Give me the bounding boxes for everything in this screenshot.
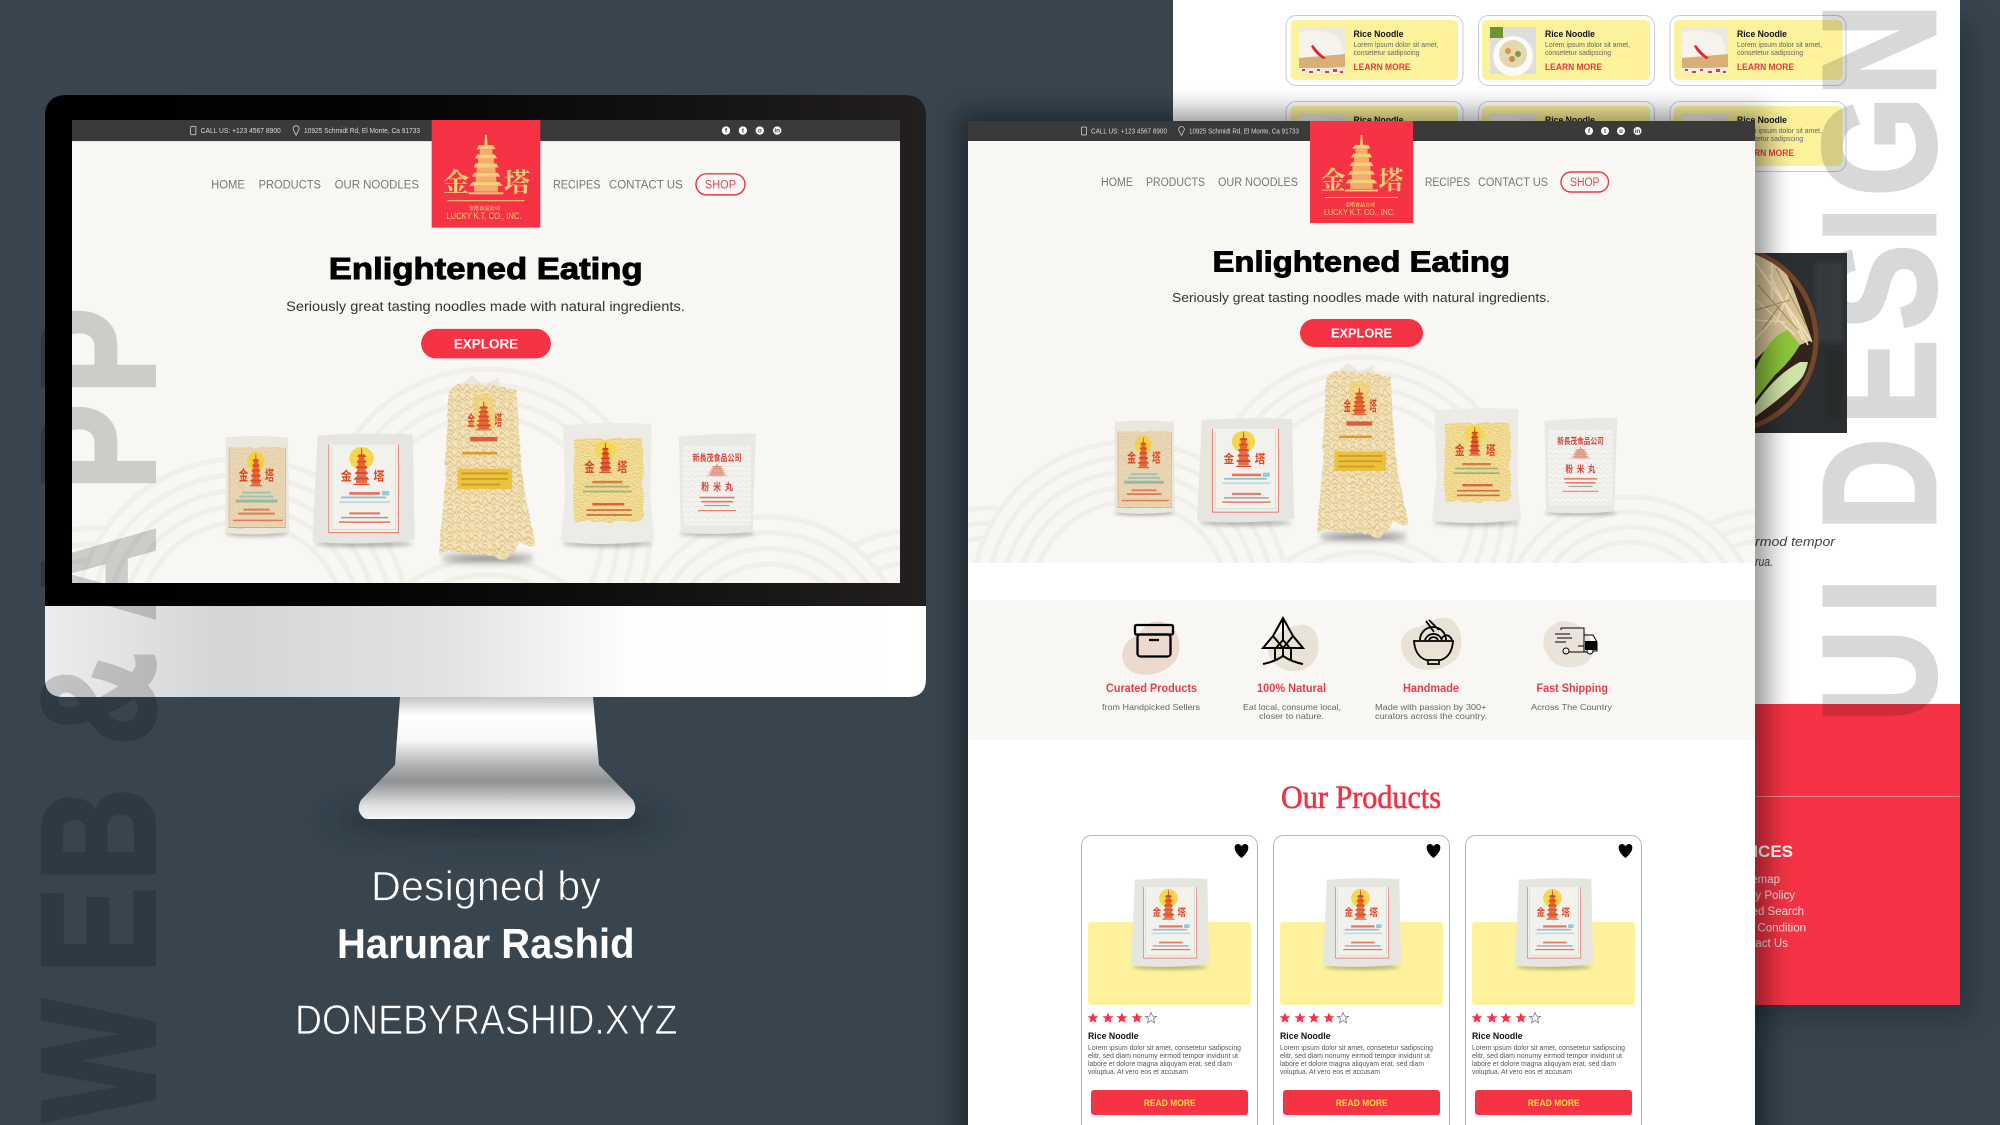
- product card 3: voluptua. At vero eos et accusam: [1472, 1067, 1572, 1076]
- hero subtitle: Seriously great tasting noodles made with natural ingredients.: [1172, 290, 1550, 305]
- logo: 金: [1320, 161, 1346, 197]
- screen top contact bar: CALL US: +123 4567 8900: [201, 126, 281, 135]
- feature: fast shipping: [1531, 621, 1613, 712]
- product bag 5: 新長茂食品公司: [1557, 435, 1604, 448]
- feature: curated products: [1102, 621, 1200, 712]
- navigation: [1101, 172, 1608, 192]
- product bag 3: [1317, 363, 1409, 540]
- navigation: RECIPES: [1425, 177, 1470, 189]
- product bag 5: [1544, 418, 1617, 515]
- screen top contact bar: t: [742, 128, 745, 135]
- website: DONEBYRASHID.XYZ: [295, 996, 678, 1043]
- product card 2: 塔: [1369, 904, 1379, 919]
- product card 3: 金: [1536, 904, 1546, 919]
- product bag 2: 金: [1224, 450, 1235, 467]
- small card 6: [1670, 102, 1846, 172]
- product card 3: Rice Noodle: [1472, 1031, 1522, 1042]
- navigation: HOME: [1101, 177, 1133, 189]
- screen top contact bar: f: [725, 128, 728, 135]
- footer services links: Advanced Search: [1713, 906, 1804, 918]
- screen product bag 3: 金: [467, 409, 475, 431]
- back page shadow: [1200, 20, 1975, 1020]
- feature: handmade: Handmade: [1403, 681, 1459, 695]
- feature: handmade: [1375, 618, 1487, 721]
- product card 1: [1082, 836, 1258, 1125]
- small card 1: Rice Noodle: [1354, 29, 1404, 40]
- product card 2: voluptua. At vero eos et accusam: [1280, 1067, 1380, 1076]
- product bag 4: 金: [1455, 441, 1465, 459]
- small card 6: Lorem ipsum dolor sit amet,: [1737, 126, 1822, 135]
- feature: handmade: Made with passion by 300+: [1375, 702, 1487, 712]
- product card 1: Rice Noodle: [1088, 1031, 1138, 1042]
- designed by: Designed by: [371, 862, 601, 910]
- screen product bag 5: 新長茂食品公司: [693, 451, 742, 464]
- small card 4: [1286, 102, 1463, 172]
- screen product bag 1: 塔: [265, 465, 274, 485]
- feature: 100% natural: Eat local, consume local,: [1243, 702, 1341, 712]
- product card 2: Lorem ipsum dolor sit amet, consetetur sadipscing: [1280, 1043, 1433, 1052]
- panel: front landing page: [968, 121, 1755, 1125]
- screen top contact bar: [71, 120, 901, 141]
- logo: LUCKY K.T. CO., INC.: [1324, 207, 1395, 217]
- small card 4: Rice Noodle: [1354, 115, 1404, 126]
- feature: 100% natural: 100% Natural: [1257, 681, 1326, 695]
- feature: fast shipping: Across The Country: [1531, 702, 1613, 712]
- monitor chin: [45, 606, 926, 697]
- product card 3: labore et dolore magna aliquyam erat, sed diam: [1472, 1059, 1616, 1068]
- screen product bag 2: 塔: [373, 467, 385, 485]
- screen hero subtitle: Seriously great tasting noodles made with natural ingredients.: [286, 299, 685, 314]
- screen logo: 塔: [504, 162, 531, 200]
- screen product bag 2: 金: [341, 467, 352, 485]
- our products heading: Our Products: [1281, 780, 1441, 816]
- small card 2: consetetur sadipscing: [1545, 48, 1611, 57]
- stand shadow: [327, 806, 667, 834]
- top contact bar: f: [1588, 129, 1591, 135]
- top contact bar: in: [1635, 129, 1640, 135]
- screen navigation: PRODUCTS: [259, 178, 321, 192]
- white page sheet: [968, 121, 1755, 1125]
- top contact bar: [968, 121, 1755, 141]
- small card 1: consetetur sadipscing: [1354, 48, 1420, 57]
- product bag 1: 塔: [1152, 449, 1161, 467]
- small recipe cards row 1 and 2: [1286, 16, 1846, 172]
- product card 1: labore et dolore magna aliquyam erat, sed diam: [1088, 1059, 1232, 1068]
- product card 1: 塔: [1177, 904, 1187, 919]
- small card 2: Lorem ipsum dolor sit amet,: [1545, 40, 1630, 49]
- small card 3: [1670, 16, 1846, 86]
- product card 1: 金: [1152, 904, 1162, 919]
- small card 2: LEARN MORE: [1545, 62, 1602, 72]
- product bag 4: [1432, 408, 1521, 526]
- body copy fragment: [1755, 534, 1836, 569]
- product card 3: [1466, 836, 1642, 1125]
- screen navigation: OUR NOODLES: [335, 178, 419, 192]
- monitor bezel: [45, 95, 926, 606]
- small card 1: Lorem ipsum dolor sit amet,: [1354, 40, 1438, 49]
- small card 2: Rice Noodle: [1545, 29, 1595, 40]
- product bag 3: 金: [1344, 396, 1352, 416]
- screen product bag 2: [312, 434, 415, 547]
- product bag 4: 塔: [1486, 441, 1496, 459]
- screen logo: 金: [443, 162, 469, 200]
- screen logo: LUCKY K.T. CO., INC.: [446, 211, 521, 221]
- watermark: UI DESIGN: UI DESIGN: [1790, 4, 1969, 722]
- product card 3: elitr, sed diam nonumy eirmod tempor invidunt ut: [1472, 1051, 1623, 1060]
- top contact bar: o: [1619, 129, 1623, 135]
- screen product bag 3: [439, 375, 536, 562]
- screen explore button: [421, 329, 551, 358]
- screen product bag 5: [679, 433, 756, 536]
- small card 5: Rice Noodle: [1545, 115, 1595, 126]
- product card 3: READ MORE: [1528, 1098, 1580, 1108]
- screen product bag 3: 塔: [494, 409, 502, 431]
- product bag 1: [1114, 420, 1175, 515]
- back page red footer: [1173, 704, 1960, 1005]
- hero title: Enlightened Eating: [1212, 246, 1510, 278]
- noodle bowl photo: [1755, 253, 1847, 433]
- product card 2: elitr, sed diam nonumy eirmod tempor invidunt ut: [1280, 1051, 1431, 1060]
- navigation: CONTACT US: [1478, 177, 1548, 189]
- explore button: [1300, 319, 1423, 347]
- product card 2: labore et dolore magna aliquyam erat, sed diam: [1280, 1059, 1424, 1068]
- screen navigation: SHOP: [705, 178, 736, 192]
- product card 2: Rice Noodle: [1280, 1031, 1330, 1042]
- feature: handmade: curators across the country.: [1375, 711, 1487, 721]
- top contact bar: CALL US: +123 4567 8900: [1091, 128, 1167, 136]
- screen top contact bar: 10925 Schmidt Rd, El Monte, Ca 91733: [304, 126, 420, 135]
- product card 1: elitr, sed diam nonumy eirmod tempor invidunt ut: [1088, 1051, 1239, 1060]
- monitor screen with hero page: [72, 120, 900, 583]
- screen top contact bar: o: [758, 128, 762, 135]
- logo: 金塔食品公司: [1345, 202, 1375, 208]
- screen product bag 1: 金: [239, 465, 248, 485]
- product bag 3: 塔: [1369, 396, 1377, 416]
- product bag 1: 金: [1127, 449, 1137, 467]
- small card 3: Lorem ipsum dolor sit amet,: [1737, 40, 1822, 49]
- small card 1: LEARN MORE: [1354, 62, 1410, 72]
- product card 3: 塔: [1561, 904, 1571, 919]
- feature: fast shipping: Fast Shipping: [1536, 681, 1608, 695]
- screen navigation: [211, 174, 745, 195]
- small card 3: Rice Noodle: [1737, 29, 1787, 40]
- explore button: EXPLORE: [1331, 326, 1392, 340]
- designer name: Harunar Rashid: [337, 920, 634, 967]
- feature: curated products: Curated Products: [1106, 681, 1197, 695]
- screen logo: [432, 120, 540, 228]
- top contact bar: t: [1604, 129, 1606, 135]
- feature: curated products: from Handpicked Sellers: [1102, 702, 1200, 712]
- product card 2: READ MORE: [1336, 1098, 1388, 1108]
- small card 5: [1478, 102, 1654, 172]
- small card 2: [1478, 16, 1654, 86]
- screen product bag 4: 塔: [617, 458, 628, 477]
- logo: 塔: [1378, 161, 1404, 197]
- panel: back UI design page: [1173, 0, 1975, 1020]
- screen navigation: CONTACT US: [609, 178, 683, 192]
- screen explore button: EXPLORE: [454, 336, 518, 351]
- product bag 2: [1197, 418, 1294, 526]
- small card 6: consetetur sadipscing: [1737, 134, 1803, 143]
- product card 1: voluptua. At vero eos et accusam: [1088, 1067, 1188, 1076]
- watermark: WEB & APP: WEB & APP: [9, 308, 188, 1121]
- product card 1: READ MORE: [1144, 1098, 1196, 1108]
- footer services links: [1712, 874, 1806, 950]
- screen top contact bar: in: [774, 128, 780, 135]
- footer divider: [1173, 796, 1960, 797]
- product bag 2: 塔: [1255, 450, 1265, 467]
- logo: [1310, 121, 1413, 223]
- small card 3: LEARN MORE: [1737, 62, 1794, 72]
- navigation: SHOP: [1570, 177, 1600, 189]
- front page drop shadow: [958, 112, 1768, 1125]
- screen product bag 4: [560, 423, 654, 547]
- body copy fragment: rua.: [1755, 554, 1773, 569]
- footer services links: Terms & Condition: [1712, 922, 1806, 934]
- product card 2: [1274, 836, 1450, 1125]
- screen navigation: HOME: [211, 178, 245, 192]
- designer credit: [295, 862, 678, 1043]
- product card 3: Lorem ipsum dolor sit amet, consetetur sadipscing: [1472, 1043, 1625, 1052]
- features band: [968, 600, 1755, 740]
- feature: 100% natural: [1243, 618, 1341, 721]
- navigation: PRODUCTS: [1146, 177, 1205, 189]
- small card 3: consetetur sadipscing: [1737, 48, 1803, 57]
- navigation: OUR NOODLES: [1218, 177, 1298, 189]
- product card 2: 金: [1344, 904, 1354, 919]
- footer services links: Contact Us: [1731, 938, 1788, 950]
- small card 6: LEARN MORE: [1737, 148, 1794, 158]
- screen logo: 金塔食品公司: [469, 204, 500, 212]
- monitor stand: [359, 697, 635, 819]
- footer services heading: SERVICES: [1707, 842, 1793, 861]
- back page white sheet: [1173, 0, 1960, 704]
- top contact bar: 10925 Schmidt Rd, El Monte, Ca 91733: [1189, 128, 1299, 136]
- product card 1: Lorem ipsum dolor sit amet, consetetur sadipscing: [1088, 1043, 1241, 1052]
- small card 6: Rice Noodle: [1737, 115, 1787, 126]
- screen product bag 1: [225, 436, 289, 536]
- small card 1: [1286, 16, 1463, 86]
- feature: 100% natural: closer to nature.: [1259, 711, 1324, 721]
- product bag 5: 粉米丸: [1565, 462, 1596, 476]
- body copy fragment: rmod tempor: [1755, 534, 1836, 549]
- panel: desktop monitor mockup: [45, 95, 926, 840]
- screen navigation: RECIPES: [553, 178, 600, 192]
- screen product bag 5: 粉米丸: [701, 478, 734, 494]
- screen product bag 4: 金: [584, 458, 595, 477]
- footer services links: Sitemap: [1738, 874, 1780, 886]
- hero section: [968, 121, 1755, 563]
- screen hero title: Enlightened Eating: [329, 252, 643, 286]
- footer services links: Privacy Policy: [1723, 890, 1795, 902]
